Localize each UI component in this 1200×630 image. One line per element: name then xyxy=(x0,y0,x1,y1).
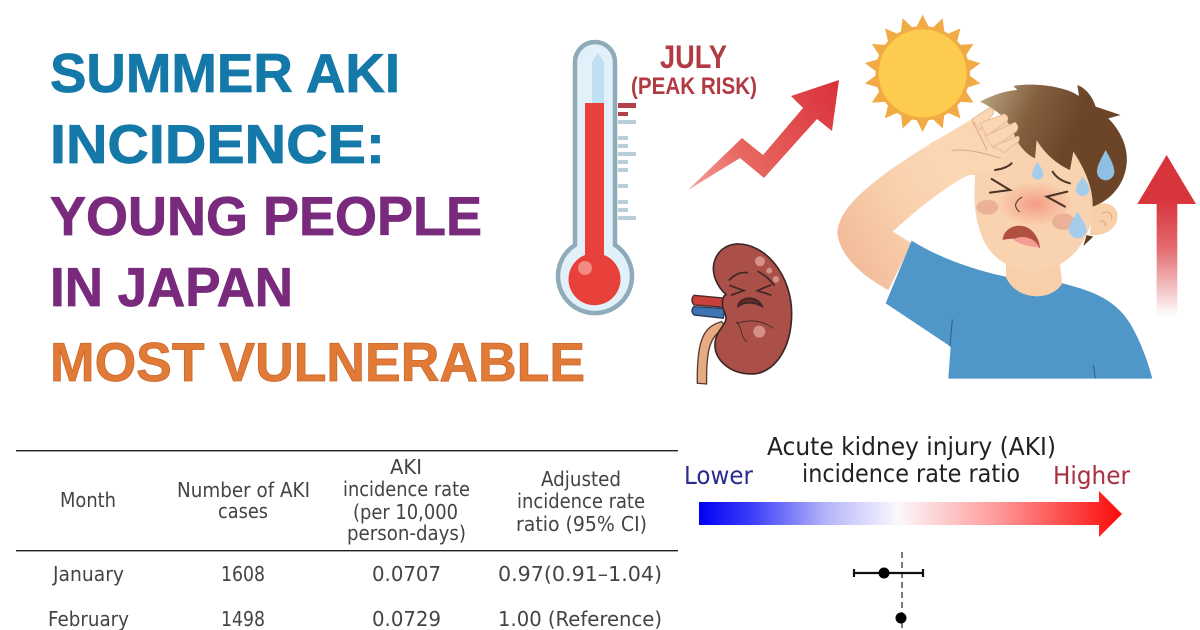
icon: sad kidney xyxy=(692,244,792,384)
label: lower: Lower xyxy=(684,461,754,490)
nose flush xyxy=(997,181,1073,227)
kidney body xyxy=(713,244,792,374)
table row: january: 1608 xyxy=(221,562,265,586)
hair xyxy=(980,85,1127,207)
table header: incidence rate xyxy=(343,477,470,501)
table row: january: 0.97(0.91–1.04) xyxy=(498,562,662,586)
kidney face xyxy=(729,272,774,342)
face xyxy=(974,118,1095,271)
sun disc xyxy=(875,26,970,121)
label: july peak risk: JULY xyxy=(660,39,727,75)
thermometer ticks xyxy=(618,103,636,220)
hand creases xyxy=(952,122,1001,158)
jaw shadow xyxy=(1083,235,1093,246)
arrow: rising zigzag xyxy=(688,80,839,190)
table header: (per 10,000 xyxy=(353,500,458,524)
finger four xyxy=(993,136,1019,153)
glass highlight xyxy=(592,53,604,103)
shirt xyxy=(886,241,1152,379)
title line: summer aki: SUMMER AKI xyxy=(50,42,400,104)
vein xyxy=(692,307,725,318)
table header: ratio (95% CI) xyxy=(516,512,647,536)
table header xyxy=(60,455,647,545)
ureter xyxy=(697,322,727,384)
table xyxy=(16,450,678,630)
table row: january xyxy=(51,562,662,586)
arrow: vertical up xyxy=(1137,155,1196,317)
reference line xyxy=(901,552,903,630)
table header: incidence rate xyxy=(517,489,645,513)
thermometer glass xyxy=(558,42,632,313)
artery xyxy=(692,295,727,307)
february point xyxy=(896,612,906,624)
head group xyxy=(930,85,1127,271)
january point xyxy=(878,568,890,578)
finger one xyxy=(972,107,994,130)
tongue xyxy=(1013,237,1039,247)
thumb xyxy=(952,149,1003,174)
finger two xyxy=(980,114,1008,136)
title line: in japan: IN JAPAN xyxy=(50,256,293,318)
table header: cases xyxy=(218,499,268,523)
ear xyxy=(1090,203,1118,235)
thermometer highlight xyxy=(578,261,592,275)
table rule header xyxy=(16,550,678,551)
label: july peak risk xyxy=(631,39,757,100)
table row: january: 0.0707 xyxy=(372,562,441,586)
table row: february xyxy=(48,607,662,630)
mouth xyxy=(1003,226,1040,248)
chart heading: Acute kidney injury (AKI) xyxy=(767,432,1056,461)
table row: january: January xyxy=(51,562,124,586)
label: higher: Higher xyxy=(1053,461,1131,490)
label: july peak risk: (PEAK RISK) xyxy=(631,73,757,100)
title line: incidence: INCIDENCE: xyxy=(50,113,385,175)
chart heading xyxy=(767,432,1056,488)
illustration: boy and sun xyxy=(837,15,1196,379)
arm xyxy=(837,137,980,290)
ear detail xyxy=(1100,212,1112,227)
icon: thermometer xyxy=(558,42,636,313)
table header: AKI xyxy=(390,455,422,479)
table header: Month xyxy=(60,488,116,512)
cheeks xyxy=(976,200,998,215)
kidney highlights xyxy=(753,256,779,338)
neck xyxy=(1006,260,1062,297)
table rule top xyxy=(16,450,678,451)
table header: person-days) xyxy=(347,521,466,545)
finger three xyxy=(985,122,1018,148)
title line: most vulnerable: MOST VULNERABLE xyxy=(50,331,585,393)
table header: Number of AKI xyxy=(177,478,310,502)
table header: Adjusted xyxy=(541,467,621,491)
mercury xyxy=(568,103,620,305)
shirt folds xyxy=(950,319,1095,379)
title line: young people: YOUNG PEOPLE xyxy=(50,185,482,247)
hand xyxy=(930,107,1019,190)
forest plot xyxy=(854,552,923,630)
arrow: lower to higher scale xyxy=(699,491,1122,537)
body group xyxy=(837,15,1196,379)
icon: sun xyxy=(863,15,982,132)
title xyxy=(50,42,585,393)
chart heading: incidence rate ratio xyxy=(802,459,1020,488)
january interval xyxy=(854,569,923,577)
sun rays xyxy=(915,15,931,31)
palm xyxy=(930,117,1007,190)
eyes, brows and nose xyxy=(990,163,1070,212)
sweat drops xyxy=(1032,150,1114,238)
